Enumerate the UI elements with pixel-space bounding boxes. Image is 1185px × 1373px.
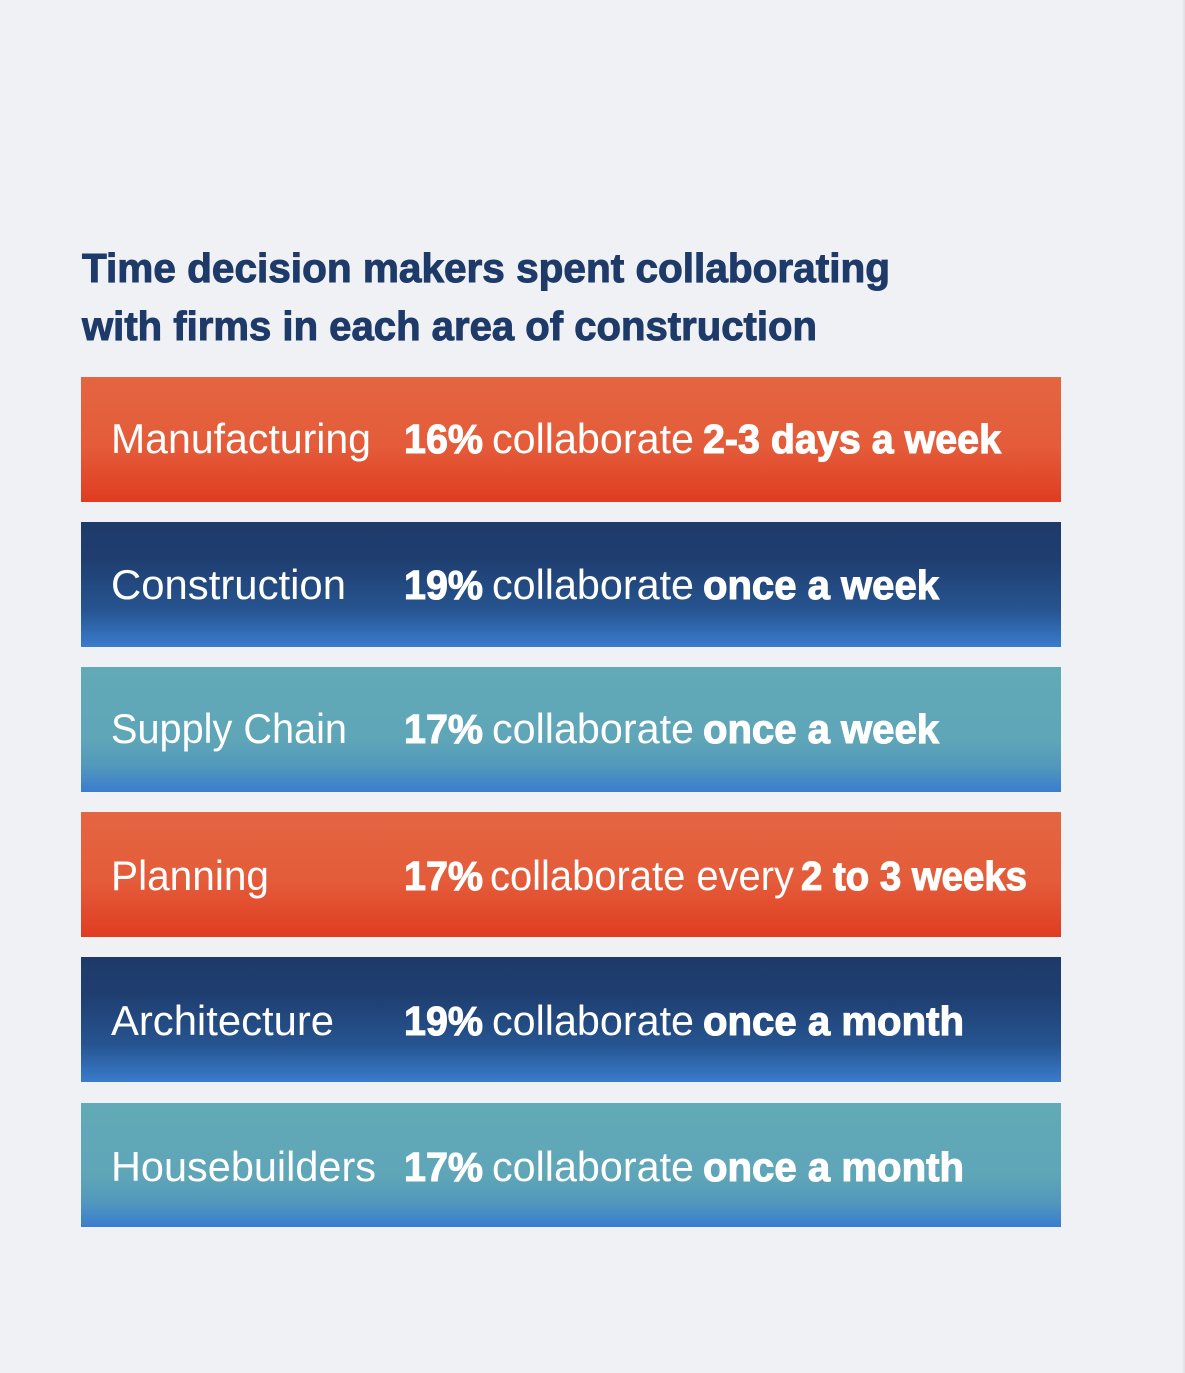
row: Housebuilders: once a month xyxy=(703,1144,964,1190)
row: Construction: 19% xyxy=(404,562,483,608)
row: Architecture: 19% xyxy=(404,998,483,1044)
row: Planning: 2 to 3 weeks xyxy=(801,853,1027,899)
row: Architecture: once a month xyxy=(703,998,964,1044)
row: Construction: collaborate xyxy=(492,561,694,608)
row: Manufacturing: collaborate xyxy=(492,415,694,462)
row: Architecture xyxy=(81,957,1061,1082)
row: Planning: collaborate every xyxy=(490,852,794,899)
row: Supply Chain: collaborate xyxy=(492,705,694,752)
title xyxy=(81,245,890,349)
row: Architecture: Architecture xyxy=(111,997,334,1044)
row: Manufacturing: 16% xyxy=(404,416,483,462)
row: Supply Chain: 17% xyxy=(404,706,483,752)
row: Planning: Planning xyxy=(111,852,269,899)
row: Construction: once a week xyxy=(703,562,939,608)
row: Construction xyxy=(81,522,1061,647)
row: Supply Chain: once a week xyxy=(703,706,939,752)
row: Housebuilders: 17% xyxy=(404,1144,483,1190)
row: Housebuilders: collaborate xyxy=(492,1143,694,1190)
title: with firms in each area of construction xyxy=(81,303,817,349)
row: Manufacturing xyxy=(81,377,1061,502)
row: Construction: Construction xyxy=(111,561,346,608)
row: Architecture: collaborate xyxy=(492,997,694,1044)
row: Supply Chain xyxy=(81,667,1061,792)
title: Time decision makers spent collaborating xyxy=(82,245,890,291)
row: Housebuilders: Housebuilders xyxy=(111,1143,376,1190)
row: Housebuilders xyxy=(81,1103,1061,1227)
row: Planning xyxy=(81,812,1061,937)
row: Manufacturing: Manufacturing xyxy=(111,415,371,462)
row: Manufacturing: 2-3 days a week xyxy=(703,416,1001,462)
row: Supply Chain: Supply Chain xyxy=(111,705,347,752)
row: Planning: 17% xyxy=(404,853,483,899)
